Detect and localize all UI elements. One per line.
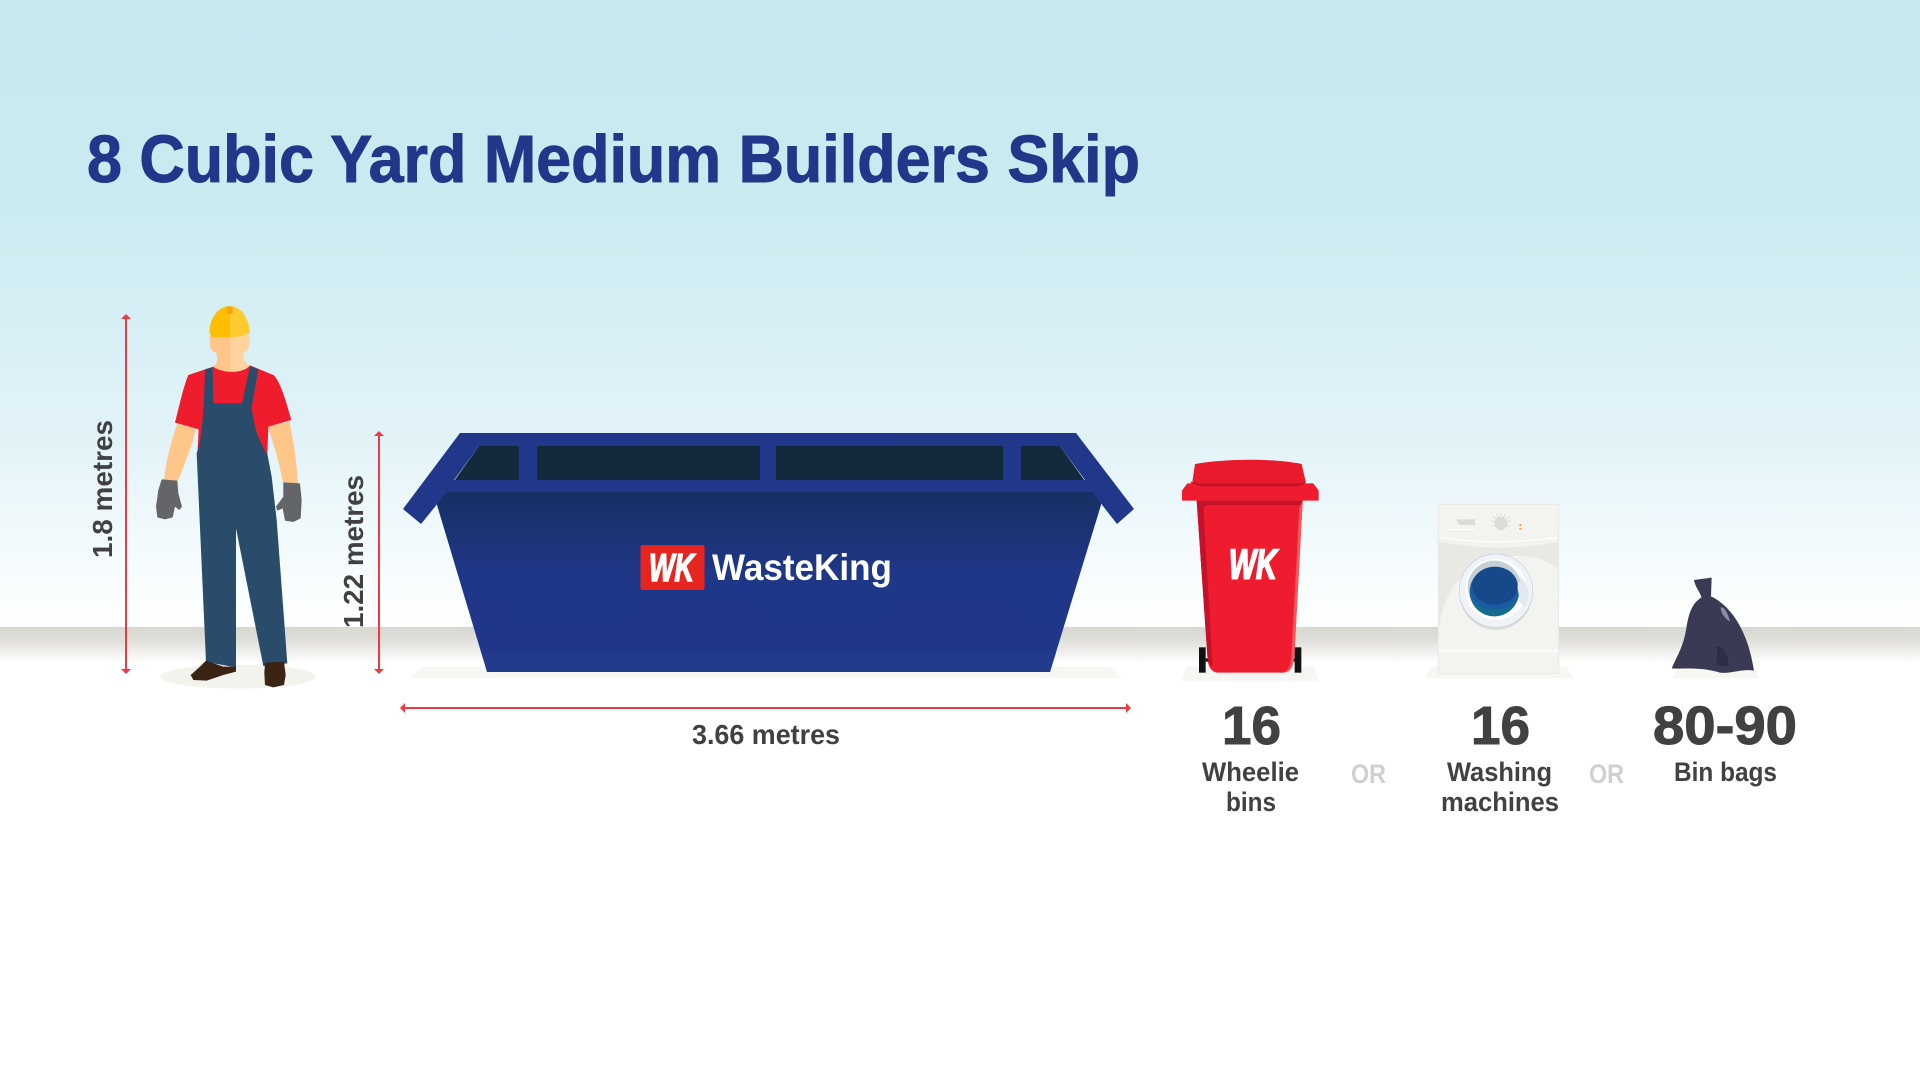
worker arms <box>164 422 298 484</box>
skip shadow <box>410 667 1122 678</box>
worker shadow <box>160 665 316 689</box>
stat: wheelie bins: Wheelie <box>1202 757 1299 787</box>
stat: wheelie bins: bins <box>1226 787 1276 817</box>
stat: washing machines <box>1441 696 1559 817</box>
machine shaded panel <box>1439 542 1558 633</box>
wheelie bin <box>1182 460 1319 682</box>
arrow: skip width <box>400 703 1131 713</box>
bag shadow <box>1673 670 1758 678</box>
bin wheels <box>1199 647 1301 673</box>
skip bottom band <box>482 653 1056 672</box>
stat: washing machines: Washing <box>1447 757 1552 787</box>
bin body highlight <box>1280 501 1303 673</box>
background sky <box>0 0 1920 627</box>
stat: bin bags <box>1653 696 1797 787</box>
stat: washing machines: machines <box>1441 787 1559 817</box>
arrow: person height <box>121 314 131 674</box>
bin shadow <box>1182 667 1318 682</box>
worker t-shirt <box>175 365 291 455</box>
WasteKing logo: WK <box>649 547 696 590</box>
machine shadow <box>1425 667 1573 678</box>
title: 8 Cubic Yard Medium Builders Skip <box>87 122 1140 197</box>
label: 1.8 metres: 1.8 metres <box>87 420 118 558</box>
ground band <box>0 627 1920 663</box>
bin body shading <box>1197 501 1303 667</box>
arrow: skip height <box>374 431 384 674</box>
worker hard hat <box>209 306 250 337</box>
bag fold <box>1717 647 1728 666</box>
bin lid flange <box>1182 483 1319 501</box>
stat: bin bags: 80-90 <box>1653 696 1797 756</box>
skip rim <box>403 433 1134 524</box>
worker gloves <box>156 479 302 522</box>
WasteKing logo <box>640 545 892 590</box>
washing machine <box>1425 504 1573 678</box>
label: 3.66 metres: 3.66 metres <box>692 719 840 750</box>
stat: wheelie bins <box>1202 696 1299 817</box>
stat: bin bags: Bin bags <box>1674 757 1777 787</box>
bag highlight <box>1721 607 1730 622</box>
bin bag <box>1672 578 1758 678</box>
bag body <box>1672 597 1754 673</box>
worker boots <box>191 661 286 687</box>
figure: worker <box>156 306 316 689</box>
skip <box>403 433 1134 678</box>
WasteKing logo: WasteKing <box>712 547 892 588</box>
bin logo: WK <box>1229 542 1279 588</box>
skip body <box>437 492 1101 672</box>
machine casing <box>1438 504 1559 673</box>
worker overalls <box>197 366 287 667</box>
separator: OR: OR <box>1351 759 1386 789</box>
machine door <box>1459 554 1533 630</box>
bin body <box>1197 501 1303 673</box>
worker head <box>210 333 251 375</box>
stat: washing machines: 16 <box>1471 696 1530 756</box>
machine control details <box>1439 513 1558 651</box>
separator: OR second: OR <box>1589 759 1624 789</box>
skip interior <box>454 446 1085 481</box>
bin lid <box>1192 460 1306 486</box>
stat: wheelie bins: 16 <box>1222 696 1281 756</box>
bag tie <box>1694 578 1712 598</box>
skip posts <box>519 446 1021 481</box>
label: 1.22 metres: 1.22 metres <box>338 475 369 628</box>
bin lid groove <box>1191 482 1306 486</box>
